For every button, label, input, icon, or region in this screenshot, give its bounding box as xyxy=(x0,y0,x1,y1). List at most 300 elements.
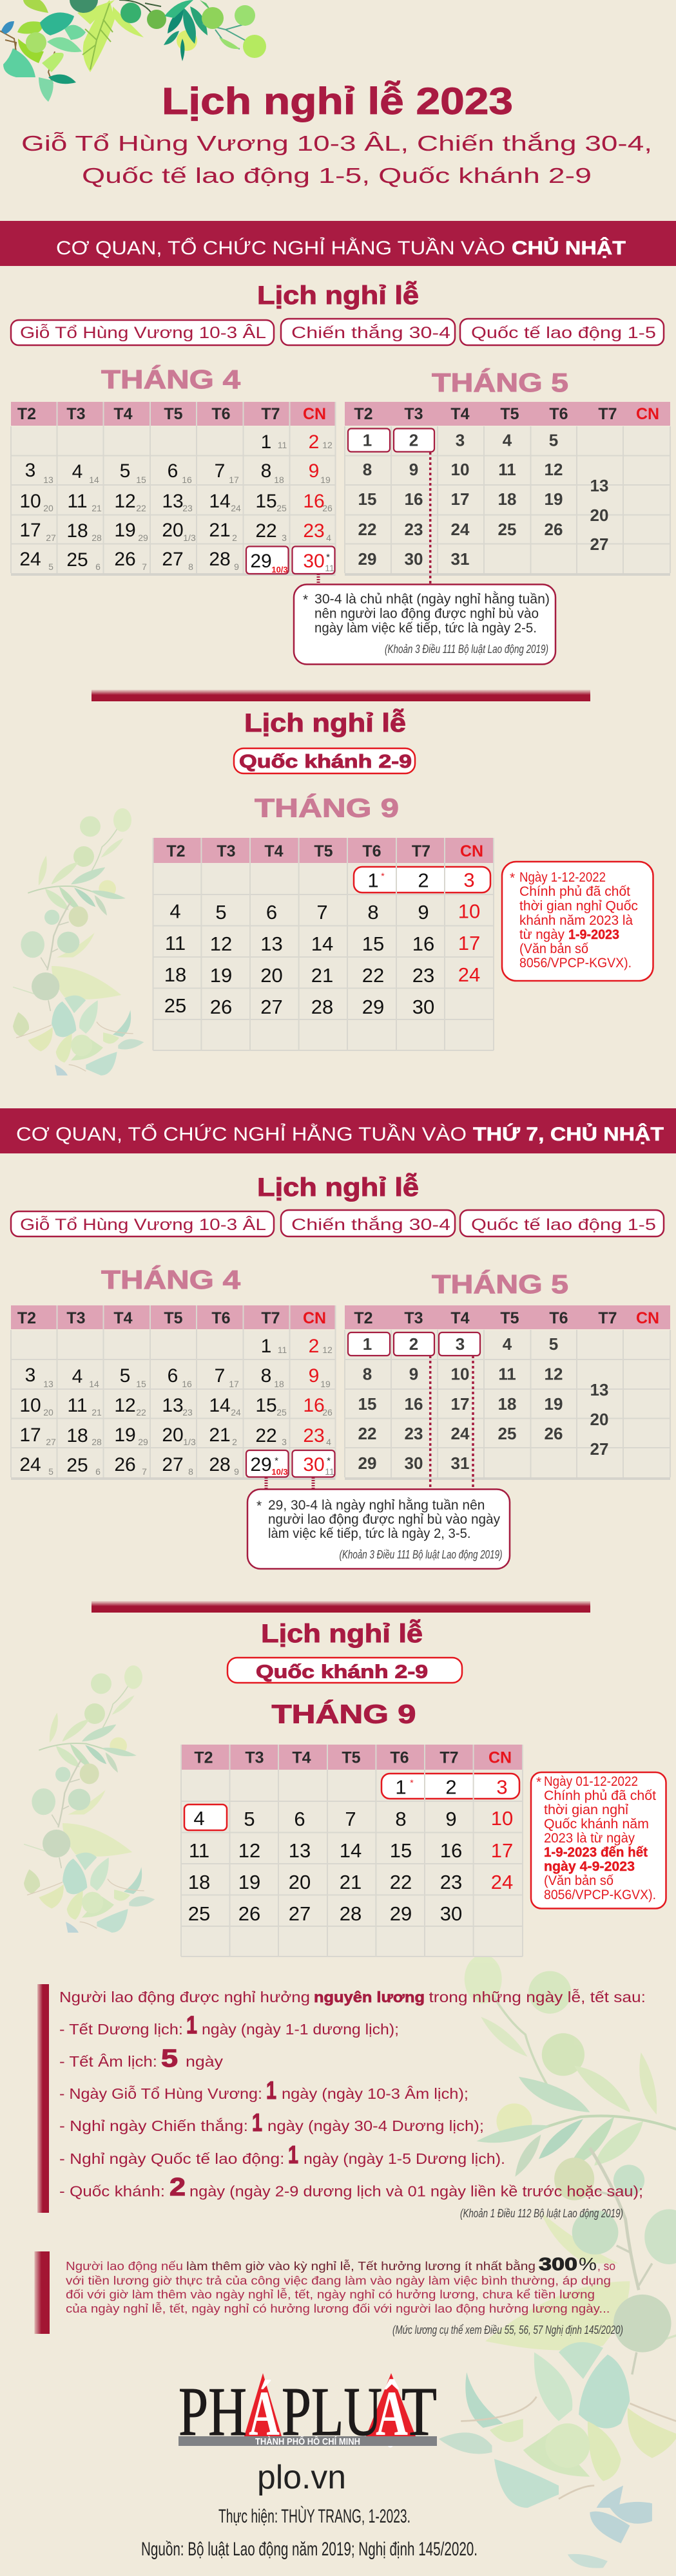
calendar: April, second: 11 xyxy=(67,1395,88,1416)
calendar: September: * xyxy=(381,871,385,881)
callout: National Day note: Chính phủ đã chốt xyxy=(519,884,630,899)
calendar: April, second: 10 xyxy=(19,1395,41,1416)
calendar: May: 18 xyxy=(498,489,516,509)
calendar: April, second: 26 xyxy=(322,1407,333,1417)
highlighted day: 29, second: 10/3 xyxy=(271,1467,288,1477)
calendar: April, second: 3 xyxy=(282,1437,287,1447)
calendar: May, second: 2 xyxy=(409,1334,418,1354)
calendar: April, second: 3 xyxy=(25,1365,35,1386)
panel: paid holidays list: 1 xyxy=(266,2077,276,2105)
highlighted day: 29 xyxy=(246,546,289,574)
panel: paid holidays list: ngày (ngày 1-1 dương lịch); xyxy=(202,2021,399,2038)
callout: National Day note: * xyxy=(510,871,515,886)
calendar: September: 2 xyxy=(418,869,429,891)
calendar: May, second: 30 xyxy=(405,1454,423,1473)
holiday pills: Quốc tế lao động 1-5 xyxy=(471,324,656,342)
calendar: April, second xyxy=(11,1305,335,1480)
calendar: September, second: 18 xyxy=(188,1871,210,1893)
calendar: May, second: 23 xyxy=(405,1424,423,1443)
calendar: May: 9 xyxy=(409,460,418,479)
calendar: April: 6 xyxy=(95,562,101,572)
calendar: May: 4 xyxy=(503,430,512,450)
calendar: September xyxy=(153,838,494,1050)
calendar: April: 23 xyxy=(303,520,325,542)
calendar: May, second: 15 xyxy=(358,1394,376,1414)
calendar: September: T5 xyxy=(314,842,333,860)
calendar: April, second: 22 xyxy=(136,1407,146,1417)
calendar: May, second: 27 xyxy=(590,1439,608,1459)
panel: paid holidays list: ngày (ngày 2-9 dương lịch và 01 ngày liền kề trước hoặc sau); xyxy=(189,2183,643,2200)
calendar: April, second: 26 xyxy=(114,1454,136,1475)
calendar: April: 14 xyxy=(209,491,231,512)
calendar: September: 24 xyxy=(458,963,480,986)
calendar: September, second: * xyxy=(410,1777,414,1788)
calendar: April: 27 xyxy=(46,533,56,543)
calendar: September: T3 xyxy=(217,842,236,860)
holiday pills, second: Giỗ Tổ Hùng Vương 10-3 ÂL xyxy=(20,1215,266,1234)
calendar: September, second: 15 xyxy=(390,1839,412,1862)
calendar: April, second: 5 xyxy=(120,1365,130,1387)
calendar: April, second: 21 xyxy=(92,1407,102,1417)
calendar: May: 20 xyxy=(590,506,608,525)
highlighted day: 4 xyxy=(184,1804,227,1830)
calendar: September: 5 xyxy=(215,901,227,923)
calendar: April, second: 28 xyxy=(209,1454,231,1475)
calendar: April, second: CN xyxy=(303,1309,326,1327)
calendar: September, second: 24 xyxy=(491,1871,513,1893)
calendar: May: 25 xyxy=(498,520,516,539)
calendar: May: 19 xyxy=(545,489,563,509)
calendar: April: 15 xyxy=(255,491,277,512)
calendar: September: 13 xyxy=(260,933,283,955)
calendar: May: 5 xyxy=(549,430,558,450)
calendar: April, second: T4 xyxy=(113,1309,133,1327)
calendar: May: 1 xyxy=(363,430,372,450)
calendar: April, second: 29 xyxy=(138,1437,148,1447)
calendar: May: T7 xyxy=(598,405,617,423)
calendar: September: 12 xyxy=(210,933,232,955)
calendar: September: 20 xyxy=(260,964,283,987)
calendar: April, second: T7 xyxy=(261,1309,280,1327)
calendar: April: 27 xyxy=(162,549,184,570)
panel: paid holidays list: ngày (ngày 30-4 Dương lịch); xyxy=(267,2117,484,2134)
calendar: May, second: 11 xyxy=(498,1364,516,1383)
calendar: September, second: 11 xyxy=(189,1839,209,1862)
calendar: April: T3 xyxy=(66,405,86,423)
callout: National Day note, second xyxy=(531,1772,666,1909)
calendar: September: T4 xyxy=(264,842,284,860)
holiday pills, second: Quốc tế lao động 1-5 xyxy=(471,1216,656,1234)
calendar: April, second: 23 xyxy=(303,1425,325,1446)
calendar: September, second: T5 xyxy=(342,1749,361,1767)
highlighted days: 1 and 2 xyxy=(348,429,434,452)
pill: National Day xyxy=(234,748,415,773)
calendar: May, second: 17 xyxy=(451,1394,469,1414)
highlighted days: 1 to 3, second xyxy=(381,1774,519,1799)
month title: May, second: THÁNG 5 xyxy=(432,1269,568,1299)
panel: overtime pay: % xyxy=(579,2254,597,2274)
logo: Pháp Luật newspaper: THÀNH PHỐ HỒ CHÍ MINH xyxy=(255,2436,360,2447)
month title: April, second: THÁNG 4 xyxy=(101,1265,240,1294)
calendar: May: 15 xyxy=(358,489,376,509)
calendar: April, second: 7 xyxy=(142,1466,147,1477)
calendar: April, second: 6 xyxy=(168,1365,178,1387)
calendar: April, second: 4 xyxy=(72,1366,82,1387)
subtitle: Giỗ Tổ Hùng Vương 10-3 ÂL, Chiến thắng 30-4, xyxy=(21,131,652,155)
calendar: April, second: 12 xyxy=(114,1395,136,1416)
calendar: April: 1/3 xyxy=(183,533,196,543)
highlighted days: 1, 2 and 3 xyxy=(348,1332,480,1356)
calendar: April: 26 xyxy=(114,549,136,570)
logo: Pháp Luật newspaper: PLU xyxy=(282,2374,382,2450)
callout: National Day note, second: Ngày 01-12-2022 xyxy=(544,1774,638,1789)
calendar: September: 19 xyxy=(210,964,232,987)
panel: paid holidays list: (Khoản 1 Điều 112 Bộ luật Lao động 2019) xyxy=(460,2207,623,2220)
calendar: April: 11 xyxy=(278,440,287,450)
calendar: May: T4 xyxy=(450,405,470,423)
calendar: September: 27 xyxy=(260,996,283,1018)
calendar: September: 28 xyxy=(311,996,333,1018)
calendar: May, second: 20 xyxy=(590,1410,608,1429)
panel: overtime pay xyxy=(35,2251,623,2336)
calendar: April: 24 xyxy=(19,549,41,570)
main title: Lịch nghỉ lễ 2023 xyxy=(162,80,513,122)
calendar: April: 19 xyxy=(320,475,331,485)
calendar: September: 23 xyxy=(412,964,434,987)
calendar: April: 1 xyxy=(261,431,271,453)
highlighted day: 30: 11 xyxy=(325,563,334,573)
calendar: April: CN xyxy=(303,405,326,423)
panel: paid holidays list xyxy=(37,1984,646,2220)
callout: National Day note, second: 1-9-2023 đến hết xyxy=(544,1845,648,1860)
calendar: September, second: 21 xyxy=(340,1871,362,1893)
callout: National Day note, second: (Văn bản số xyxy=(544,1873,613,1888)
logo: Pháp Luật newspaper: PH xyxy=(179,2374,247,2450)
banner: Saturday and Sunday off xyxy=(0,1108,676,1153)
callout: National Day note, second: 8056/VPCP-KGVX). xyxy=(544,1888,656,1902)
calendar: April: 26 xyxy=(322,503,333,513)
callout: compensatory day for 30-4 xyxy=(294,585,555,665)
calendar: September, second: 8 xyxy=(395,1808,407,1830)
panel: overtime pay: làm thêm giờ vào kỳ nghỉ lễ, Tết hưởng lương ít nhất bằng xyxy=(186,2259,536,2273)
logo: Pháp Luật newspaper: Ậ xyxy=(376,2378,408,2449)
callout: compensatory days for 29, 30-4: người lao động được nghỉ bù vào ngày xyxy=(268,1512,500,1527)
calendar: April: 8 xyxy=(261,460,271,482)
calendar: May, second: CN xyxy=(636,1309,659,1327)
connectors: days to second note xyxy=(266,1356,473,1489)
calendar: May, second: 18 xyxy=(498,1394,516,1414)
panel: paid holidays list: ngày (ngày 1-5 Dương lịch). xyxy=(304,2150,505,2167)
calendar: April, second: 20 xyxy=(43,1407,53,1417)
calendar: September: 4 xyxy=(169,900,181,922)
callout: National Day note, second: thời gian nghỉ xyxy=(544,1803,628,1817)
month title: April: THÁNG 4 xyxy=(101,365,240,394)
calendar: May: 8 xyxy=(363,460,372,479)
calendar: September, second: 9 xyxy=(445,1808,457,1830)
calendar: September, second: 17 xyxy=(491,1839,513,1862)
highlighted day: 29, second xyxy=(246,1450,289,1477)
calendar: May, second: 12 xyxy=(545,1364,563,1383)
calendar: April, second: 15 xyxy=(136,1379,146,1389)
calendar: September: 1 xyxy=(367,869,379,891)
calendar: April: 5 xyxy=(48,562,53,572)
highlighted day: 29: 29 xyxy=(250,551,272,572)
calendar: September: 9 xyxy=(418,901,429,923)
calendar: April, second: 5 xyxy=(48,1466,53,1477)
calendar: September, second: 12 xyxy=(238,1839,260,1862)
calendar: May, second: 19 xyxy=(545,1394,563,1414)
callout: National Day note xyxy=(502,862,653,981)
illustration: pale sprig at bottom right xyxy=(439,1955,676,2568)
calendar: May, second xyxy=(345,1305,670,1480)
calendar: April: T6 xyxy=(211,405,231,423)
calendar: September, second: 1 xyxy=(395,1776,407,1798)
calendar: April: 21 xyxy=(92,503,102,513)
calendar: April, second: 9 xyxy=(309,1365,319,1387)
calendar: September: 14 xyxy=(311,933,333,955)
calendar: May, second: 24 xyxy=(451,1424,470,1443)
calendar: April: T7 xyxy=(261,405,280,423)
panel: paid holidays list: 1 xyxy=(186,2012,197,2039)
calendar: April: 28 xyxy=(209,549,231,570)
banner: Sunday off: CƠ QUAN, TỔ CHỨC NGHỈ HẰNG TUẦN VÀO xyxy=(56,237,505,259)
calendar: September: 3 xyxy=(463,869,475,891)
logo: Pháp Luật newspaper: Á xyxy=(249,2378,280,2449)
calendar: April, second: 20 xyxy=(162,1425,184,1446)
callout: compensatory days for 29, 30-4: (Khoản 3 Điều 111 Bộ luật Lao động 2019) xyxy=(339,1548,503,1561)
panel: paid holidays list: - Ngày Giỗ Tổ Hùng Vương: xyxy=(59,2085,262,2102)
calendar: April: 2 xyxy=(309,431,319,453)
callout: National Day note: từ ngày xyxy=(519,927,565,942)
calendar: May: 13 xyxy=(590,476,608,495)
logo: Pháp Luật newspaper xyxy=(179,2373,437,2450)
calendar: April, second: T6 xyxy=(211,1309,231,1327)
panel: paid holidays list: 5 xyxy=(161,2045,178,2072)
calendar: May, second: T3 xyxy=(404,1309,423,1327)
callout: compensatory day for 30-4: ngày làm việc kế tiếp, tức là ngày 2-5. xyxy=(314,621,537,636)
calendar: May, second: 22 xyxy=(358,1424,376,1443)
calendar: April: T2 xyxy=(17,405,36,423)
calendar: April, second: 14 xyxy=(89,1379,99,1389)
calendar: May, second: T2 xyxy=(354,1309,373,1327)
calendar: September, second: T3 xyxy=(245,1749,264,1767)
calendar: September, second: 10 xyxy=(491,1807,513,1830)
calendar: April, second: 7 xyxy=(215,1365,225,1387)
calendar: May, second: 10 xyxy=(451,1364,469,1383)
calendar: September, second: 20 xyxy=(289,1871,311,1893)
calendar: September, second: T4 xyxy=(292,1749,311,1767)
calendar: September, second: 2 xyxy=(445,1776,457,1798)
calendar: September, second: 19 xyxy=(238,1871,260,1893)
calendar: May: 10 xyxy=(451,460,469,479)
calendar: April, second: 27 xyxy=(162,1454,184,1475)
calendar: September: 8 xyxy=(367,901,379,923)
calendar: May: 26 xyxy=(545,520,563,539)
calendar: April, second: 25 xyxy=(66,1455,88,1476)
calendar: September: 18 xyxy=(164,963,186,986)
calendar: September, second: 13 xyxy=(289,1839,311,1862)
calendar: April, second: 22 xyxy=(255,1425,277,1446)
calendar: May: 30 xyxy=(405,549,423,569)
subtitle: Quốc tế lao động 1-5, Quốc khánh 2-9 xyxy=(82,164,592,187)
calendar: May: 22 xyxy=(358,520,376,539)
calendar: April: 23 xyxy=(182,503,193,513)
calendar: September, second: 28 xyxy=(340,1902,362,1925)
calendar: April: 17 xyxy=(19,520,41,541)
highlighted day: 30, second: * xyxy=(327,1455,331,1466)
calendar: September, second: 14 xyxy=(340,1839,362,1862)
calendar: April: 18 xyxy=(274,475,284,485)
illustration: pale sprig beside second September calendar xyxy=(24,1665,155,1933)
calendar: May: 11 xyxy=(498,460,516,479)
banner: Sunday off: CHỦ NHẬT xyxy=(512,237,626,259)
calendar: September: T6 xyxy=(362,842,381,860)
calendar: September: 22 xyxy=(362,964,384,987)
section divider xyxy=(92,690,590,701)
calendar: May, second: T6 xyxy=(549,1309,568,1327)
calendar: April, second: 13 xyxy=(43,1379,53,1389)
calendar: April: 3 xyxy=(282,533,287,543)
calendar: September, second: 5 xyxy=(244,1808,255,1830)
highlighted day: 30, second: 11 xyxy=(325,1466,334,1477)
calendar: September: 29 xyxy=(362,996,384,1018)
highlighted day: 30: 30 xyxy=(303,551,325,572)
calendar: April: 22 xyxy=(136,503,146,513)
calendar: April, second: 17 xyxy=(19,1425,41,1446)
calendar: September, second: 4 xyxy=(193,1807,205,1830)
calendar: May, second: 13 xyxy=(590,1380,608,1399)
credits: Nguồn: Bộ luật Lao động năm 2019; Nghị định 145/2020. xyxy=(141,2539,478,2560)
calendar: April, second: 19 xyxy=(114,1425,136,1446)
calendar: April: 15 xyxy=(136,475,146,485)
calendar: April: 2 xyxy=(232,533,237,543)
panel: overtime pay: Người lao động nếu xyxy=(66,2260,183,2273)
calendar: April: 24 xyxy=(231,503,241,513)
credits: Thực hiện: THÙY TRANG, 1-2023. xyxy=(218,2506,410,2527)
panel: overtime pay: 300 xyxy=(539,2254,577,2274)
holiday pills: Giỗ Tổ Hùng Vương 10-3 ÂL xyxy=(20,323,266,342)
calendar: April: 13 xyxy=(43,475,53,485)
calendar: May, second: 3 xyxy=(456,1334,465,1354)
holiday pills, second xyxy=(11,1210,664,1236)
highlighted day: 29, second: * xyxy=(275,1455,278,1466)
calendar: May: 2 xyxy=(409,430,418,450)
calendar: April: 4 xyxy=(326,533,331,543)
panel: paid holidays list: ngày (ngày 10-3 Âm lịch); xyxy=(282,2085,468,2102)
panel: paid holidays list: ngày xyxy=(186,2053,223,2070)
calendar: April: T4 xyxy=(113,405,133,423)
callout: National Day note, second: * xyxy=(536,1775,541,1790)
panel: paid holidays list: 2 xyxy=(169,2174,186,2201)
calendar: April, second: 27 xyxy=(46,1437,56,1447)
calendar: May: 16 xyxy=(405,489,423,509)
calendar: April xyxy=(11,402,335,576)
subtitle xyxy=(21,131,652,187)
calendar: April, second: 28 xyxy=(92,1437,102,1447)
calendar: May, second: T5 xyxy=(500,1309,519,1327)
calendar: May, second: 5 xyxy=(549,1334,558,1354)
callout: compensatory days for 29, 30-4 xyxy=(247,1489,510,1569)
banner: Sunday off xyxy=(0,221,676,266)
calendar: April: 17 xyxy=(229,475,239,485)
calendar: April, second: 21 xyxy=(209,1425,231,1446)
panel: paid holidays list: - Nghỉ ngày Quốc tế lao động: xyxy=(59,2150,285,2167)
calendar: September, second: 6 xyxy=(294,1808,305,1830)
callout: National Day note: (Văn bản số xyxy=(519,942,588,956)
calendar: May, second: 1 xyxy=(363,1334,372,1354)
calendar: April: 25 xyxy=(66,549,88,571)
month title: September, second: THÁNG 9 xyxy=(272,1699,416,1728)
callout: National Day note: 8056/VPCP-KGVX). xyxy=(519,956,632,971)
calendar: September, second: 16 xyxy=(440,1839,462,1862)
heading: holiday schedule, National Day: Lịch nghỉ lễ xyxy=(244,708,406,737)
calendar: September: 17 xyxy=(458,932,480,954)
calendar: April, second: 13 xyxy=(162,1395,184,1416)
credits xyxy=(141,2506,478,2560)
calendar: September, second: 7 xyxy=(345,1808,356,1830)
callout: National Day note, second: Chính phủ đã chốt xyxy=(544,1788,656,1803)
calendar: April: 9 xyxy=(309,460,319,482)
calendar: May: 31 xyxy=(451,549,469,569)
illustration: top left leaves xyxy=(0,0,266,102)
calendar: September: T7 xyxy=(412,842,430,860)
calendar: September: 15 xyxy=(362,933,384,955)
connector: 2 to note xyxy=(429,452,431,585)
calendar: April: 3 xyxy=(25,460,35,481)
heading: holiday schedule: Lịch nghỉ lễ xyxy=(257,280,419,310)
heading: holiday schedule, second: Lịch nghỉ lễ xyxy=(257,1172,419,1202)
calendar: April: 22 xyxy=(255,520,277,542)
highlighted day: 29, second: 29 xyxy=(250,1454,272,1475)
calendar: September, second: 26 xyxy=(238,1902,260,1925)
panel: overtime pay: đối với giờ làm thêm vào ngày nghỉ lễ, tết, ngày nghỉ có hưởng lương, chưa kể tiền lương xyxy=(66,2287,595,2301)
panel: paid holidays list: - Quốc khánh: xyxy=(59,2183,165,2200)
calendar: September, second: 25 xyxy=(188,1902,210,1925)
calendar: September, second: 27 xyxy=(289,1902,311,1925)
illustration: pale sprig beside first September calendar xyxy=(13,808,144,1075)
banner: Saturday and Sunday off: CƠ QUAN, TỔ CHỨC NGHỈ HẰNG TUẦN VÀO xyxy=(16,1123,467,1145)
calendar: April, second: T3 xyxy=(66,1309,86,1327)
calendar: April: 13 xyxy=(162,491,184,512)
calendar: April, second: 23 xyxy=(182,1407,193,1417)
calendar: September: 10 xyxy=(458,900,480,922)
panel: paid holidays list: - Nghỉ ngày Chiến thắng: xyxy=(59,2117,248,2134)
calendar: April, second: T2 xyxy=(17,1309,36,1327)
calendar: May: 23 xyxy=(405,520,423,539)
calendar: April, second: T5 xyxy=(164,1309,183,1327)
calendar: May: 27 xyxy=(590,535,608,554)
calendar: April, second: 4 xyxy=(326,1437,331,1447)
connector: 30 to note xyxy=(317,574,320,585)
panel: paid holidays list: 1 xyxy=(252,2109,262,2137)
calendar: May: 12 xyxy=(545,460,563,479)
calendar: April: 19 xyxy=(114,520,136,541)
calendar: April: 8 xyxy=(188,562,193,572)
calendar: April: 20 xyxy=(43,503,53,513)
calendar: May, second: 4 xyxy=(503,1334,512,1354)
calendar: September: 16 xyxy=(412,933,434,955)
calendar: September, second: 23 xyxy=(440,1871,462,1893)
section divider, second xyxy=(92,1601,590,1613)
pill: National Day, second: Quốc khánh 2-9 xyxy=(256,1662,428,1682)
calendar: April, second: 18 xyxy=(66,1425,88,1446)
calendar: May, second: 31 xyxy=(451,1454,469,1473)
calendar: April, second: 6 xyxy=(95,1466,101,1477)
callout: National Day note: thời gian nghỉ Quốc xyxy=(519,899,638,913)
holiday pills xyxy=(11,319,664,345)
callout: National Day note, second: ngày 4-9-2023 xyxy=(544,1859,635,1874)
calendar: April: 12 xyxy=(322,440,333,450)
